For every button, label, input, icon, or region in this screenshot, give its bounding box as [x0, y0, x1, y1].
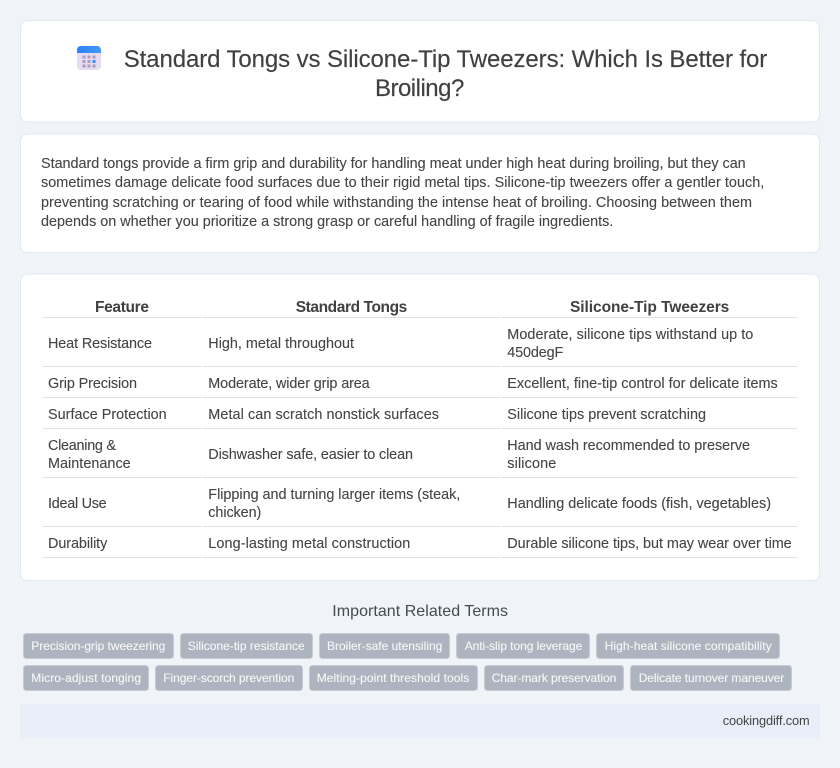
row: grip precision: Grip Precision [48, 376, 137, 392]
row: surface protection [48, 407, 706, 423]
title: Standard Tongs vs Silicone-Tip Tweezers: Which Is Better for [124, 46, 767, 73]
tag [456, 634, 590, 658]
row: surface protection: Metal can scratch nonstick surfaces [208, 407, 439, 423]
row: cleaning and maintenance [48, 438, 750, 472]
row: ideal use: Ideal Use [48, 496, 107, 512]
table header [95, 299, 729, 316]
row: heat resistance: Moderate, silicone tips withstand up to [507, 327, 753, 343]
tag: Micro-adjust tonging [31, 671, 141, 685]
tag [180, 634, 312, 658]
row: surface protection: Surface Protection [48, 407, 167, 423]
tag: Precision-grip tweezering [31, 639, 165, 653]
tag: High-heat silicone compatibility [605, 639, 772, 653]
table header: Standard Tongs [296, 299, 407, 316]
panel: comparison table [20, 274, 820, 580]
row: ideal use: Flipping and turning larger items (steak, [208, 487, 460, 503]
row: cleaning and maintenance: silicone [507, 456, 556, 472]
tag: Anti-slip tong leverage [465, 639, 583, 653]
table header: Silicone-Tip Tweezers [570, 299, 729, 316]
row: ideal use [48, 487, 771, 521]
row: surface protection: Silicone tips prevent scratching [507, 407, 706, 423]
icon: calendar [77, 46, 101, 70]
tag [320, 634, 450, 658]
row: heat resistance [48, 327, 753, 361]
footer bar [20, 704, 820, 738]
tag: Silicone-tip resistance [188, 639, 305, 653]
tag [596, 634, 780, 658]
tag: Char-mark preservation [492, 671, 616, 685]
row: heat resistance: Heat Resistance [48, 336, 152, 352]
row: cleaning and maintenance: Dishwasher safe, easier to clean [208, 447, 413, 463]
tag: Delicate turnover maneuver [639, 671, 784, 685]
panel: description [20, 134, 820, 252]
row: durability: Durable silicone tips, but may wear over time [507, 536, 792, 552]
panel: title card [20, 20, 820, 122]
row: ideal use: chicken) [208, 505, 261, 521]
description text [41, 156, 764, 230]
row: grip precision: Moderate, wider grip area [208, 376, 370, 392]
row: ideal use: Handling delicate foods (fish, vegetables) [507, 496, 771, 512]
row: cleaning and maintenance: Cleaning & [48, 438, 116, 454]
description text: sometimes damage delicate food surfaces due to their rigid metal tips. Silicone-tip tweezers offer a gentler touch, [41, 175, 764, 191]
row: durability: Long-lasting metal construction [208, 536, 410, 552]
tag [24, 634, 174, 658]
footer source: cookingdiff.com [723, 713, 810, 728]
tag [484, 666, 624, 690]
row: grip precision [48, 376, 778, 392]
tag: Finger-scorch prevention [163, 671, 294, 685]
tag: Melting-point threshold tools [317, 671, 469, 685]
description text: depends on whether you prioritize a strong grasp or careful handling of fragile ingredients. [41, 214, 613, 230]
tag [156, 666, 302, 690]
tag [24, 666, 148, 690]
title [124, 46, 767, 102]
title: Broiling? [375, 75, 464, 102]
tag [310, 666, 478, 690]
row: durability [48, 536, 792, 552]
tag [630, 666, 792, 690]
row: cleaning and maintenance: Maintenance [48, 456, 131, 472]
row: cleaning and maintenance: Hand wash recommended to preserve [507, 438, 750, 454]
description text: preventing scratching or tearing of food while withstanding the intense heat of broiling. Choosing between them [41, 195, 752, 211]
row: grip precision: Excellent, fine-tip control for delicate items [507, 376, 778, 392]
related term tags [24, 634, 792, 690]
tag: Broiler-safe utensiling [327, 639, 442, 653]
row: heat resistance: High, metal throughout [208, 336, 354, 352]
row: heat resistance: 450degF [507, 345, 564, 361]
description text: Standard tongs provide a firm grip and durability for handling meat under high heat during broiling, but they can [41, 156, 746, 172]
row: durability: Durability [48, 536, 108, 552]
heading: related terms: Important Related Terms [332, 603, 508, 620]
table header: Feature [95, 299, 149, 316]
